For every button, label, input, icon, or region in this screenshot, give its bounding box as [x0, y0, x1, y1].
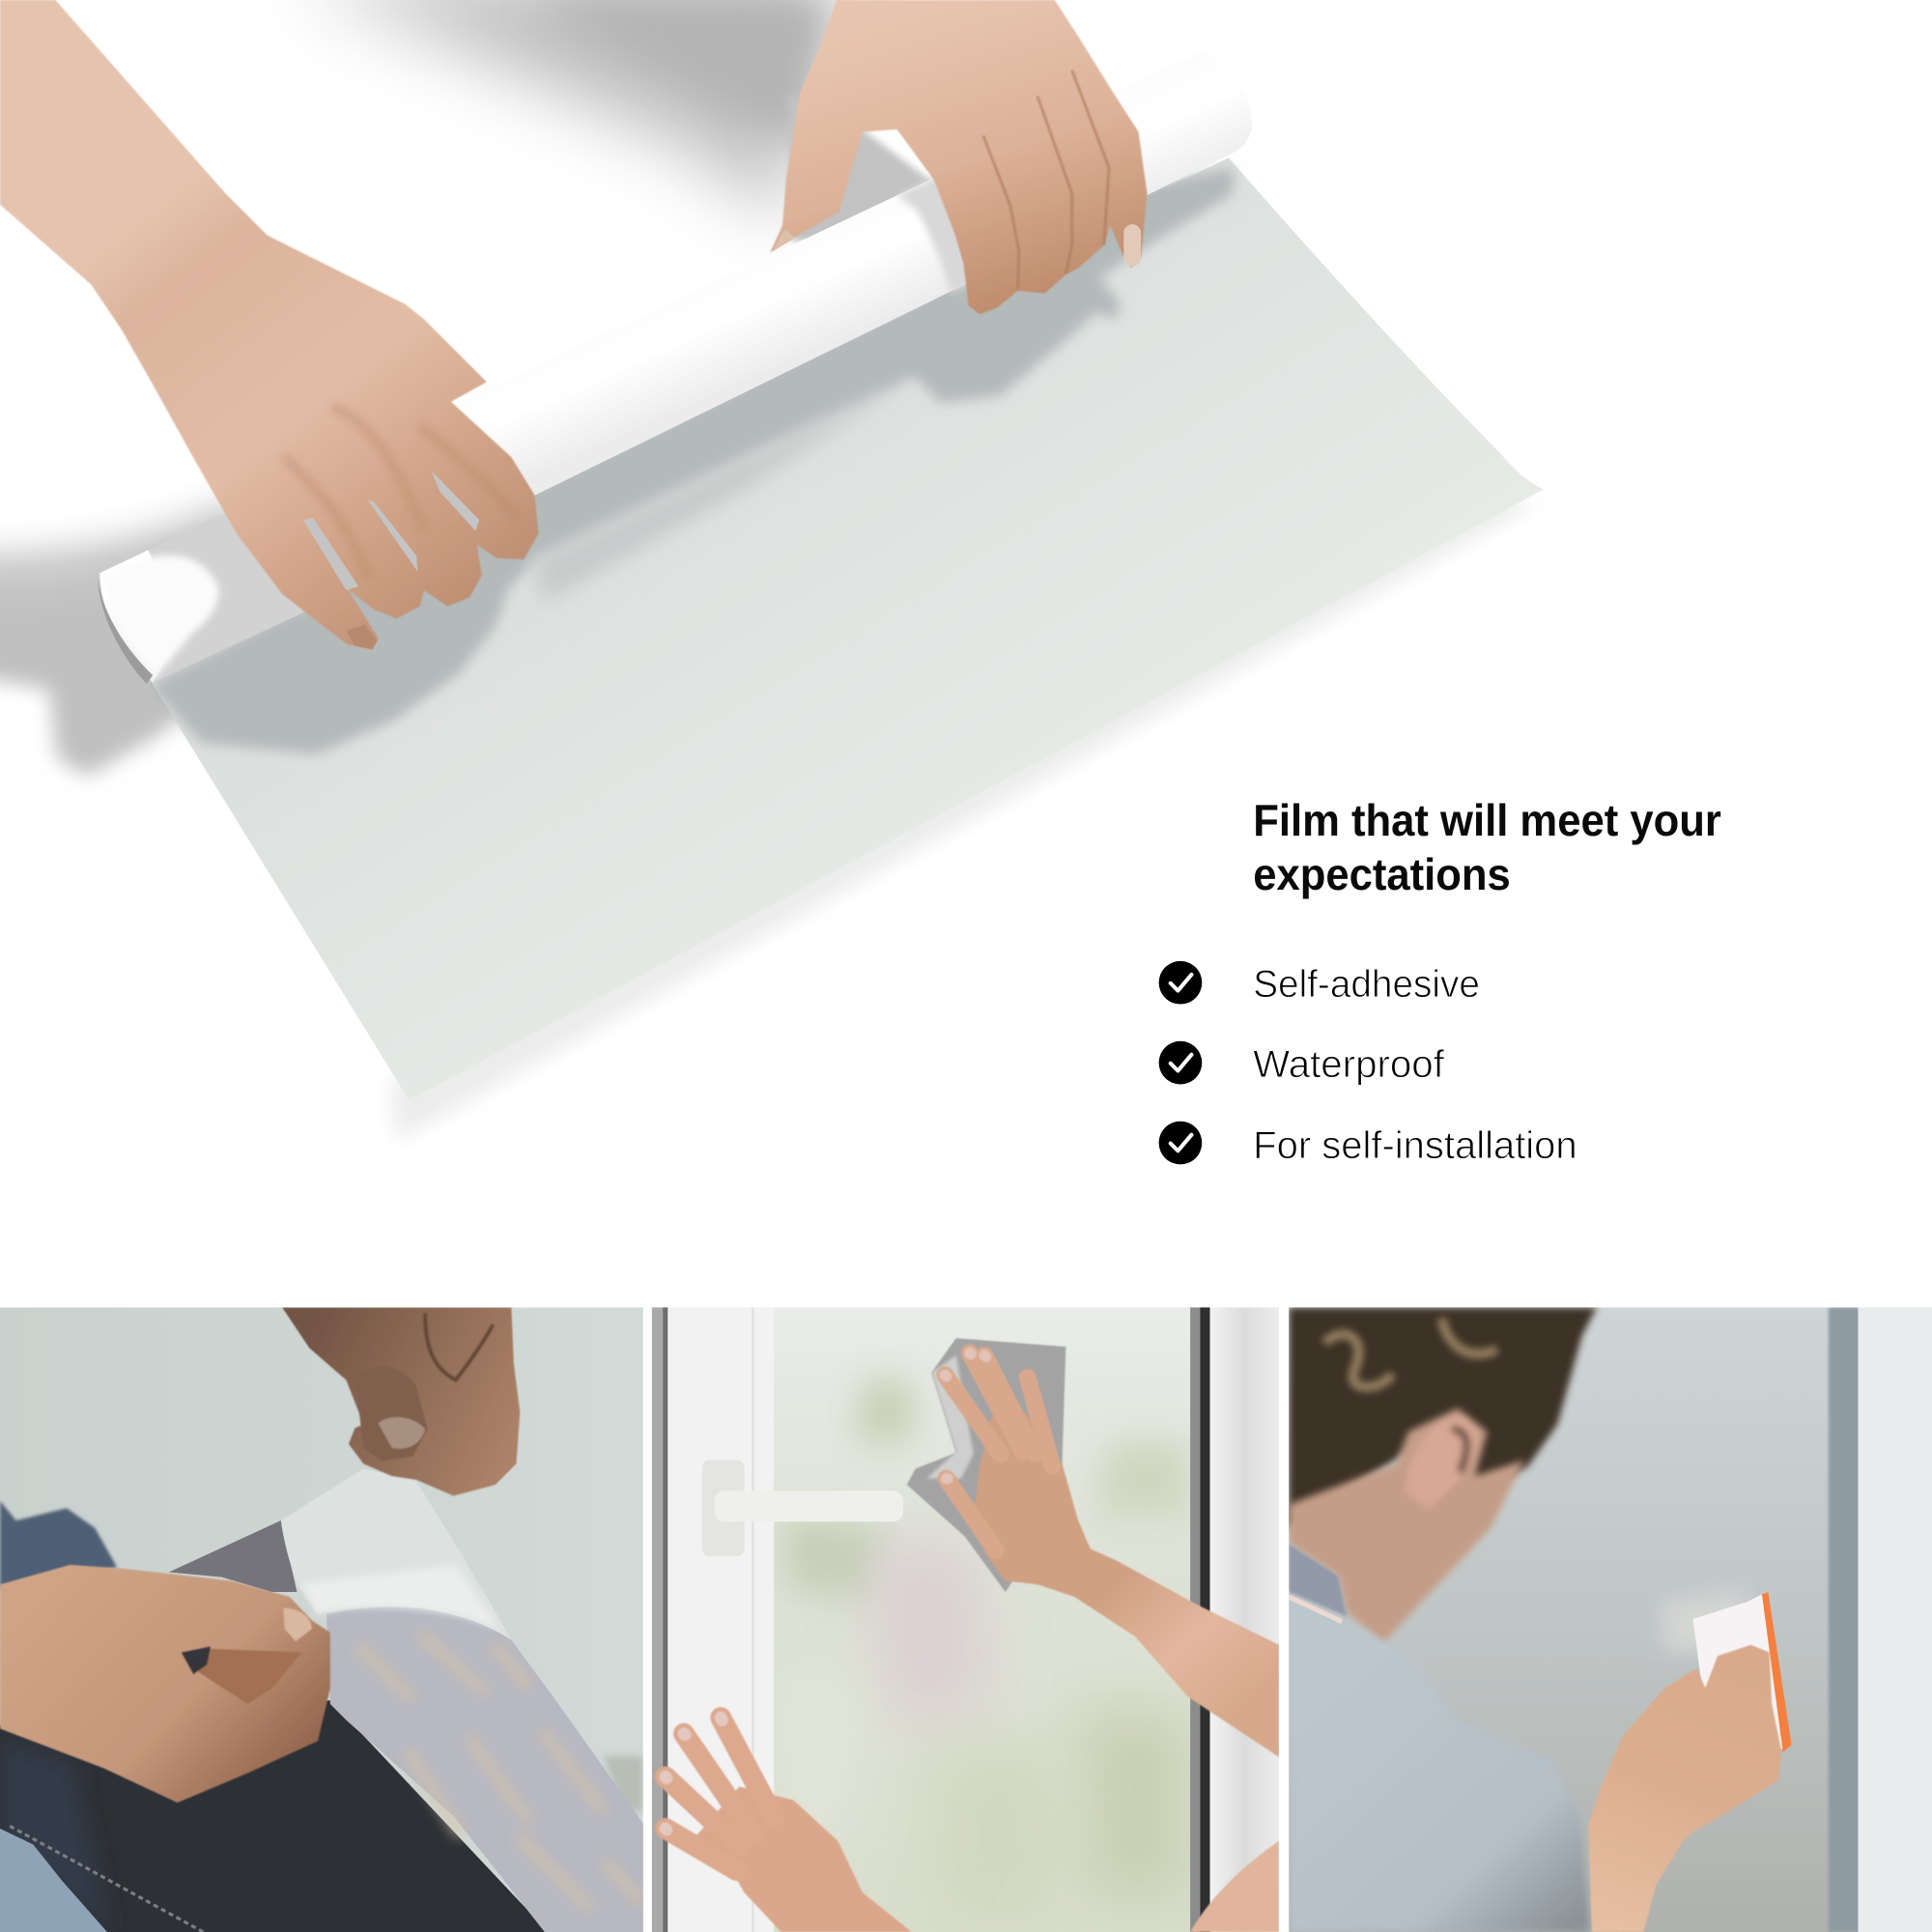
lower hand nails	[666, 1718, 722, 1830]
window frame	[652, 1307, 1279, 1932]
upper palm crease	[425, 1314, 493, 1380]
finger gap	[182, 1646, 211, 1674]
roll shaded part near left end	[148, 446, 370, 683]
cleaning cloth	[907, 1338, 1065, 1592]
icon: check self-installation	[1159, 1122, 1202, 1164]
thumb nail	[283, 1608, 312, 1641]
upper thumb	[355, 1367, 428, 1462]
roll end face	[98, 576, 153, 684]
lower hand fingers	[666, 1718, 774, 1870]
shirt collar	[1289, 1544, 1347, 1616]
second forearm corner	[1190, 1841, 1279, 1932]
roll lit end	[103, 555, 219, 678]
left hand and arm	[0, 0, 538, 649]
heading	[1253, 795, 1721, 899]
heading: Film that will meet your	[1253, 795, 1721, 845]
film smudge	[1663, 1589, 1749, 1651]
film drop shadow	[389, 493, 1538, 1141]
cleaning finger nails	[945, 1353, 985, 1479]
window handle	[702, 1460, 903, 1556]
label: waterproof: Waterproof	[1253, 1043, 1445, 1086]
inner fingers shade	[198, 1649, 301, 1704]
white roll	[98, 52, 1252, 684]
upper hand	[282, 1307, 520, 1495]
upper thumb nail	[379, 1417, 425, 1449]
photo panel: squeegee application	[1289, 1307, 1932, 1932]
hair	[1289, 1307, 1597, 1528]
window frame edge	[1829, 1307, 1932, 1932]
heading: expectations	[1253, 849, 1511, 899]
label: for self-installation: For self-installation	[1253, 1124, 1577, 1167]
icon: check self-adhesive	[1159, 961, 1202, 1005]
backing sheet with adhesive pattern	[327, 1607, 647, 1932]
grey sweater	[1289, 1597, 1589, 1932]
squeegee	[1693, 1592, 1792, 1752]
shadow under the roll and hands	[151, 167, 1234, 754]
label: self-adhesive: Self-adhesive	[1253, 963, 1480, 1006]
cleaning hand and arm	[945, 1353, 1279, 1757]
lower hand	[0, 1565, 330, 1803]
dark jeans	[0, 1700, 549, 1932]
gaps between right fingers	[983, 71, 1109, 290]
grey liner sheet	[169, 1520, 297, 1592]
product scene: hands unrolling film	[0, 0, 1544, 1141]
denim jacket	[0, 1501, 117, 1589]
frosted film sheet	[151, 157, 1544, 1100]
left knuckle shading	[283, 407, 518, 579]
right finger nail	[1123, 224, 1141, 267]
right thumb nail	[773, 229, 793, 251]
icon: check waterproof	[1159, 1041, 1202, 1084]
frosted glass	[774, 1307, 1193, 1932]
light denim knee	[0, 1829, 107, 1932]
feature list	[1159, 961, 1577, 1167]
window sill at right	[604, 1756, 643, 1811]
cleaning fingers	[945, 1353, 1052, 1550]
left thumb nail	[346, 625, 377, 649]
photo panel: cleaning window	[652, 1307, 1279, 1932]
photo panel: peeling backing film	[0, 1307, 647, 1932]
roll shaded part under right hand	[897, 154, 985, 294]
collar trim	[1289, 1597, 1342, 1622]
hand holding squeegee	[1588, 1645, 1781, 1932]
hair highlights	[1324, 1319, 1497, 1387]
cast shadows on white surface	[0, 0, 936, 777]
right hand	[770, 0, 1148, 314]
peeled translucent film	[281, 1468, 511, 1640]
neck and ear	[1289, 1408, 1524, 1642]
lower hand	[666, 1718, 912, 1932]
gaps between left fingers	[303, 470, 479, 590]
